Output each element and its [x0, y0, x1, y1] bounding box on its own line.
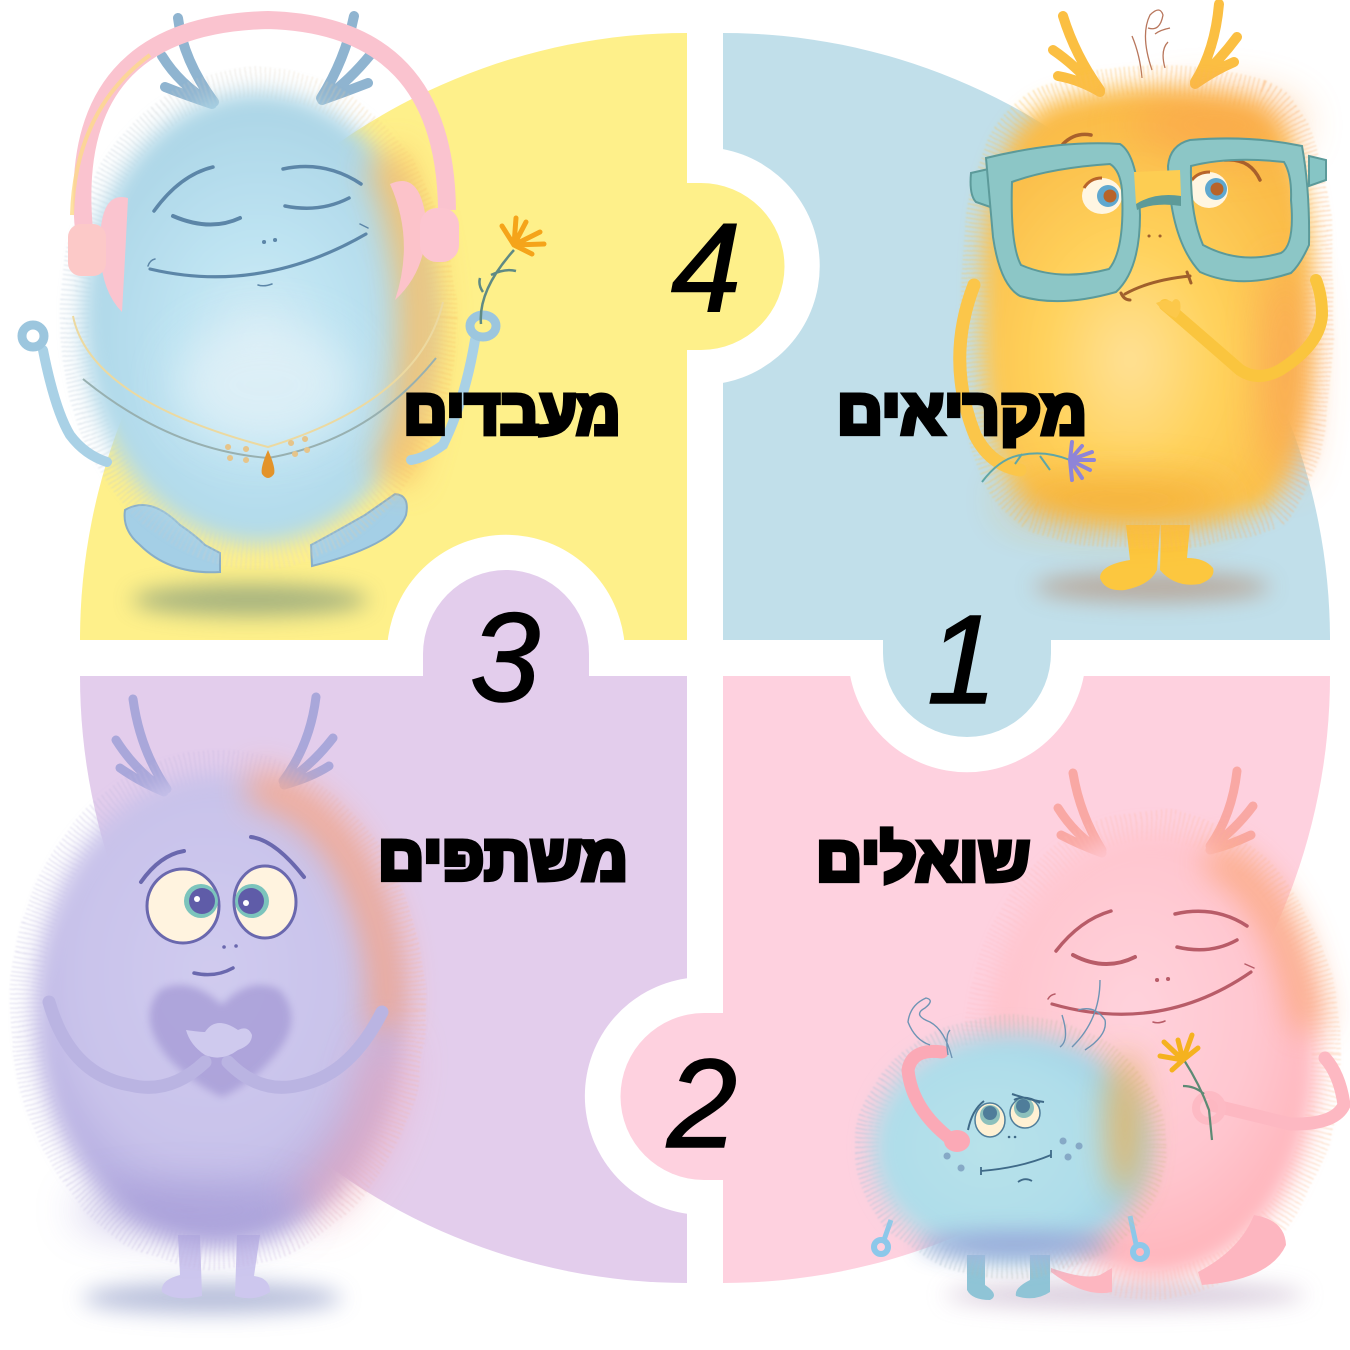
- nose and mouth: [194, 946, 236, 975]
- monster: orange with glasses: [960, 4, 1326, 602]
- orange rim: [385, 155, 419, 480]
- piece 4: yellow quadrant: [80, 33, 687, 640]
- flower: [982, 442, 1094, 482]
- piece 3: purple quadrant: [80, 676, 687, 1283]
- antennae: [1058, 771, 1253, 853]
- body: [986, 833, 1318, 1277]
- tab 2 pink: [620, 1013, 724, 1180]
- fur hair ring: [26, 766, 410, 1254]
- shadow: [945, 1281, 1305, 1309]
- small right ring hand: [1133, 1245, 1147, 1259]
- tab 3 purple: [423, 570, 589, 677]
- headband yellow edge: [72, 55, 150, 215]
- small monster arms with ring hands: [884, 1216, 1136, 1244]
- ear left: [100, 197, 128, 312]
- label: top-right word: מקריאים: [837, 376, 1087, 448]
- left hand: [22, 325, 44, 347]
- notch in pink piece: [850, 676, 1084, 772]
- shadow: [82, 1282, 342, 1314]
- number 2: 2: [666, 1033, 737, 1174]
- number 1: 1: [927, 589, 997, 730]
- tab 1 blue: [883, 639, 1051, 737]
- orange rim: [1210, 855, 1310, 1030]
- antennae: [162, 16, 371, 104]
- top orange glow: [1130, 95, 1300, 155]
- piece 1: blue quadrant: [723, 33, 1330, 640]
- small monster orange rim: [1107, 1053, 1143, 1197]
- orange rim: [250, 785, 387, 1030]
- right arm: [1165, 280, 1322, 376]
- hair strands: [1132, 10, 1170, 78]
- monster: purple: [26, 697, 410, 1314]
- antennae: [116, 697, 333, 792]
- pendant: [262, 450, 274, 478]
- ear right: [390, 181, 426, 300]
- necklace yellow: [73, 302, 443, 447]
- fur hair ring: [974, 80, 1318, 535]
- monster: pink with small blue one: [867, 771, 1344, 1309]
- small monster body: [872, 1033, 1150, 1261]
- belly highlight: [175, 323, 355, 447]
- small monster face: [947, 1094, 1079, 1182]
- ear pad left: [68, 224, 106, 276]
- shadow: [132, 584, 368, 616]
- pink lower rim: [305, 1040, 385, 1210]
- left arm: [43, 350, 107, 462]
- piece 2: pink quadrant: [723, 676, 1330, 1283]
- face: [148, 167, 368, 286]
- eyes: [141, 837, 304, 943]
- small monster pink hand: [944, 1130, 970, 1152]
- small monster pink arm: [908, 1051, 952, 1140]
- label: bottom-right word: שואלים: [816, 823, 1030, 895]
- label: top-left word: מעבדים: [404, 376, 620, 448]
- label: bottom-left word: משתפים: [378, 822, 628, 894]
- bridge shadow: [1136, 195, 1181, 210]
- face: [1048, 911, 1254, 1023]
- monster: blue with headphones: [22, 16, 544, 616]
- necklace grey: [83, 358, 436, 458]
- bottom glow: [1005, 480, 1235, 520]
- number 4: 4: [671, 197, 741, 338]
- eyes: [1063, 134, 1260, 214]
- notch in blue piece: [723, 149, 820, 383]
- right hand: [470, 315, 496, 337]
- body: [82, 92, 434, 544]
- glasses: [971, 138, 1326, 301]
- left arm: [960, 285, 1020, 470]
- left arm: [49, 1002, 205, 1087]
- right hand: [1156, 299, 1180, 318]
- feet: [125, 494, 407, 572]
- right frame: [1168, 138, 1309, 281]
- nose and mouth: [1121, 236, 1191, 300]
- ear pad right: [420, 208, 459, 262]
- headband: [82, 20, 447, 230]
- flower: [1160, 1035, 1212, 1140]
- bridge: [1134, 170, 1181, 204]
- small left ring hand: [874, 1240, 888, 1254]
- flower: [479, 218, 544, 324]
- small monster legs: [967, 1255, 1050, 1300]
- beads: [228, 439, 307, 460]
- notch in purple piece: [585, 978, 687, 1214]
- right glow: [1267, 260, 1303, 480]
- shadow: [1034, 572, 1270, 602]
- small monster fur ring: [867, 1027, 1155, 1267]
- arm: [1212, 1058, 1344, 1124]
- fur hair ring: [74, 82, 442, 554]
- legs and feet: [162, 1235, 270, 1298]
- bottom shade: [75, 1190, 305, 1230]
- temples: [971, 156, 1326, 208]
- hands: [186, 1023, 252, 1058]
- antennae: [1053, 4, 1237, 92]
- feet: [1051, 1215, 1286, 1293]
- hand: [1196, 1095, 1222, 1121]
- right arm: [411, 340, 475, 460]
- heart shape: [150, 985, 291, 1097]
- small monster hair curls: [908, 980, 1105, 1058]
- small monster bottom rim: [920, 1231, 1110, 1259]
- fur hair ring: [978, 825, 1326, 1285]
- body: [34, 774, 402, 1246]
- legs and feet: [1100, 525, 1213, 590]
- number 3: 3: [470, 587, 540, 728]
- tab 4 yellow: [686, 183, 785, 350]
- notch in yellow piece: [388, 535, 624, 640]
- left frame: [986, 143, 1140, 301]
- right arm: [228, 1012, 382, 1087]
- body: [981, 88, 1312, 526]
